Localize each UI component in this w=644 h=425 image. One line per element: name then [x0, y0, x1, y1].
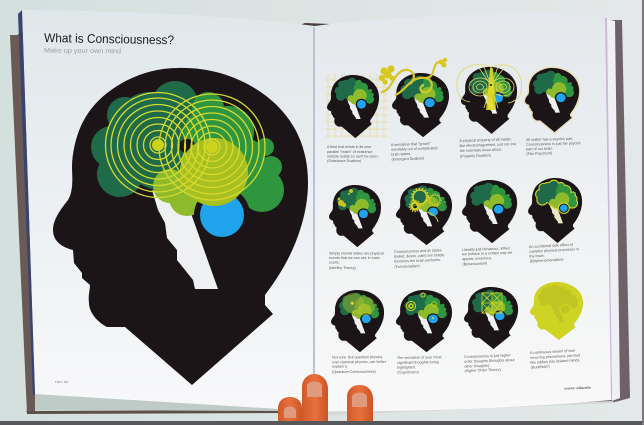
head 4: pan psychism	[525, 68, 579, 132]
caption 8: complex physical processes in	[529, 247, 579, 254]
caption 11: Consciousness is just higher	[464, 353, 512, 359]
caption 6: (belief, desire, pain) are simply	[394, 253, 445, 259]
caption 5: events that we can see in brain	[329, 256, 380, 260]
caption 9: explain it.	[332, 365, 348, 369]
title: What is Consciousness?	[44, 31, 174, 47]
brain scan spots	[338, 189, 353, 207]
caption 12: recurring phenomena, pinched	[530, 353, 580, 360]
caption 8: An accidental side effect of	[529, 243, 574, 249]
fingers	[278, 374, 373, 421]
caption 3: (Property Dualism)	[460, 153, 491, 158]
head 11: higher order theory	[464, 287, 518, 349]
head 10: cognitivism	[396, 290, 452, 352]
caption 9: Not sure. But quantum physics,	[332, 355, 383, 359]
caption 8: the brain.	[529, 254, 545, 259]
caption 10: (Cognitivism)	[397, 370, 419, 375]
caption 2: (Emergent Dualism)	[391, 156, 424, 162]
gears	[410, 188, 441, 222]
caption 7: Literally just behaviour. When	[462, 246, 510, 252]
caption 10: significant thoughts being	[397, 360, 439, 365]
caption 6: Consciousness and its states	[394, 248, 442, 254]
caption 12: A continuous stream of ever	[530, 349, 576, 355]
caption 2: brain states.	[391, 152, 411, 157]
caption 1: parallel "realm" of existence	[327, 150, 372, 154]
caption 11: (Higher Order Theory)	[464, 368, 501, 373]
caption 7: we behave in a certain way we	[462, 251, 512, 256]
caption 10: The sensation of your most	[397, 355, 441, 360]
head 6: functionalism	[396, 183, 452, 245]
caption 3: like electromagnetism, just not one	[460, 142, 516, 148]
head 5: identity theory	[329, 185, 381, 247]
source note: source: wikipedia	[564, 386, 591, 390]
caption 11: order thoughts (thoughts about	[464, 358, 515, 364]
head 3: property dualism	[457, 65, 521, 134]
caption 12: (Buddhism)	[531, 365, 550, 370]
head 8: epiphenomenalism	[528, 178, 582, 243]
caption 9: over classical physics, can better	[332, 360, 387, 364]
caption 2: A sensation that "grows"	[391, 142, 431, 147]
nested squares	[482, 293, 502, 313]
black gap between lobes	[179, 139, 195, 153]
head 12: buddhism	[530, 282, 583, 340]
caption 1: outside reality so can't be seen.	[327, 154, 379, 158]
caption 11: other thoughts).	[464, 364, 490, 369]
caption 5: scans.	[329, 261, 340, 265]
caption 6: (Functionalism)	[394, 264, 420, 269]
caption 1: A field that exists in its own	[327, 145, 371, 149]
caption 9: (Quantum Consciousness)	[332, 370, 376, 374]
caption 7: appear conscious.	[462, 256, 492, 261]
caption 10: highlighted.	[397, 365, 416, 370]
highlighted thoughts	[406, 293, 436, 311]
caption 1: (Substance Dualism)	[327, 159, 361, 163]
caption 4: part of our brain.	[526, 147, 553, 151]
head 7: behaviourism	[462, 180, 517, 243]
caption 4: Consciousness is just the psychic	[526, 141, 581, 147]
head 9: quantum consciousness	[331, 290, 384, 352]
caption 8: (Epiphenomenalism)	[530, 258, 564, 263]
caption 2: inevitably out of complicated	[391, 146, 438, 152]
page number: TWO / 307	[55, 380, 69, 384]
caption 7: (Behaviourism)	[462, 262, 487, 266]
vine and flowers	[381, 62, 442, 95]
caption 4: (Pan Psychism)	[526, 151, 552, 156]
magnetic field lines	[457, 65, 521, 110]
caption 5: (Identity Theory)	[329, 266, 356, 270]
caption 3: the scientists know about.	[460, 148, 502, 153]
caption 4: All matter has a psychic part.	[526, 137, 573, 142]
concentric rings	[106, 92, 265, 200]
yellow grid	[325, 74, 388, 138]
head 1: substance dualism	[325, 74, 388, 138]
head 2: emergent dualism	[379, 58, 449, 137]
caption 6: functions the brain performs.	[394, 258, 441, 264]
overlapping translucent zones	[342, 293, 364, 313]
left page	[22, 10, 315, 411]
caption 5: Simply mental states are physical	[329, 252, 384, 256]
caption 3: A physical property of all matter,	[459, 137, 512, 143]
lime overlap	[180, 138, 248, 206]
right page	[315, 13, 611, 411]
caption 12: like eddies into isolated minds.	[530, 358, 581, 365]
fingernails	[284, 406, 296, 418]
large head with brain and concentric rings	[53, 68, 308, 385]
subtitle: Make up your own mind	[44, 48, 121, 55]
